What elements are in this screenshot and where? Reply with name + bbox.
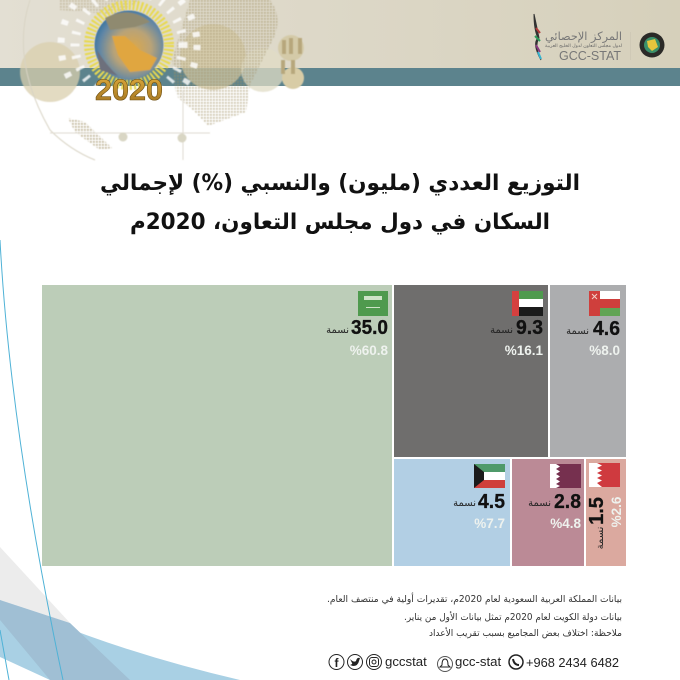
panel: Qatar: %4.8 xyxy=(550,516,581,531)
icon: twitter xyxy=(348,654,362,670)
panel: Saudi Arabia: نسمة xyxy=(326,325,349,336)
panel: Qatar: 2.8 xyxy=(554,491,581,513)
panel: Saudi Arabia: %60.8 xyxy=(350,343,388,358)
panel: Bahrain xyxy=(586,459,626,566)
GCC-STAT logo: GCC-STAT xyxy=(559,49,621,63)
icon: GCC emblem xyxy=(640,32,664,58)
treemap chart xyxy=(42,285,626,566)
panel: Bahrain: %2.6 xyxy=(609,496,624,527)
icon: Bahrain flag xyxy=(589,463,620,487)
header globe artwork xyxy=(20,0,304,160)
icon: snapchat xyxy=(438,656,452,672)
social contact bar xyxy=(329,654,619,672)
panel: UAE: نسمة xyxy=(490,325,513,336)
icon: Qatar flag xyxy=(550,464,581,488)
icon: Oman flag xyxy=(589,291,620,316)
panel: Qatar: نسمة xyxy=(528,498,551,509)
year 2020: 2020 xyxy=(95,74,163,107)
phone number: +968 2434 6482 xyxy=(526,655,619,670)
panel: Bahrain: نسمة xyxy=(595,527,606,549)
panel: Oman: نسمة xyxy=(566,326,589,337)
panel: Saudi Arabia: 35.0 xyxy=(351,317,388,339)
panel: Qatar xyxy=(512,459,584,566)
GCC-STAT logo: المركز الإحصائي xyxy=(545,29,622,44)
icon: instagram xyxy=(366,654,382,670)
icon: facebook xyxy=(329,654,344,670)
icon: facebook: f xyxy=(334,656,340,670)
icon: whatsapp xyxy=(509,655,523,669)
panel: Oman: %8.0 xyxy=(589,343,620,358)
icon: UAE flag xyxy=(512,291,543,316)
GCC-STAT logo xyxy=(534,14,664,63)
panel: UAE xyxy=(394,285,548,457)
panel: Kuwait xyxy=(394,459,510,566)
title: التوزيع العددي (مليون) والنسبي (%) لإجمالي xyxy=(100,171,580,196)
panel: Bahrain: 1.5 xyxy=(586,497,608,525)
title: السكان في دول مجلس التعاون، 2020م xyxy=(130,210,550,235)
panel: Kuwait: %7.7 xyxy=(474,516,505,531)
footnotes xyxy=(327,592,622,639)
panel: Kuwait: 4.5 xyxy=(478,491,505,513)
panel: UAE: %16.1 xyxy=(505,343,543,358)
GCC-STAT logo: لدول مجلس التعاون لدول الخليج العربية xyxy=(545,44,622,49)
left background swooshes xyxy=(0,240,240,680)
footnotes: ملاحظة: اختلاف بعض المجاميع بسبب تقريب الأعداد xyxy=(429,627,622,639)
panel: Saudi Arabia xyxy=(42,285,392,566)
handle: gcc-stat: gcc-stat xyxy=(455,654,502,669)
icon: Saudi flag xyxy=(358,291,388,316)
footnotes: بيانات دولة الكويت لعام 2020م تمثل بيانات الأول من يناير. xyxy=(404,611,622,623)
handle: gccstat: gccstat xyxy=(385,654,427,669)
panel: Oman xyxy=(550,285,626,457)
header banner xyxy=(0,0,680,86)
icon: Kuwait flag xyxy=(474,464,505,488)
title xyxy=(100,171,580,235)
panel: Kuwait: نسمة xyxy=(453,498,476,509)
panel: UAE: 9.3 xyxy=(516,317,543,339)
panel: Oman: 4.6 xyxy=(593,318,620,340)
footnotes: بيانات المملكة العربية السعودية لعام 2020م، تقديرات أولية في منتصف العام. xyxy=(327,592,622,605)
